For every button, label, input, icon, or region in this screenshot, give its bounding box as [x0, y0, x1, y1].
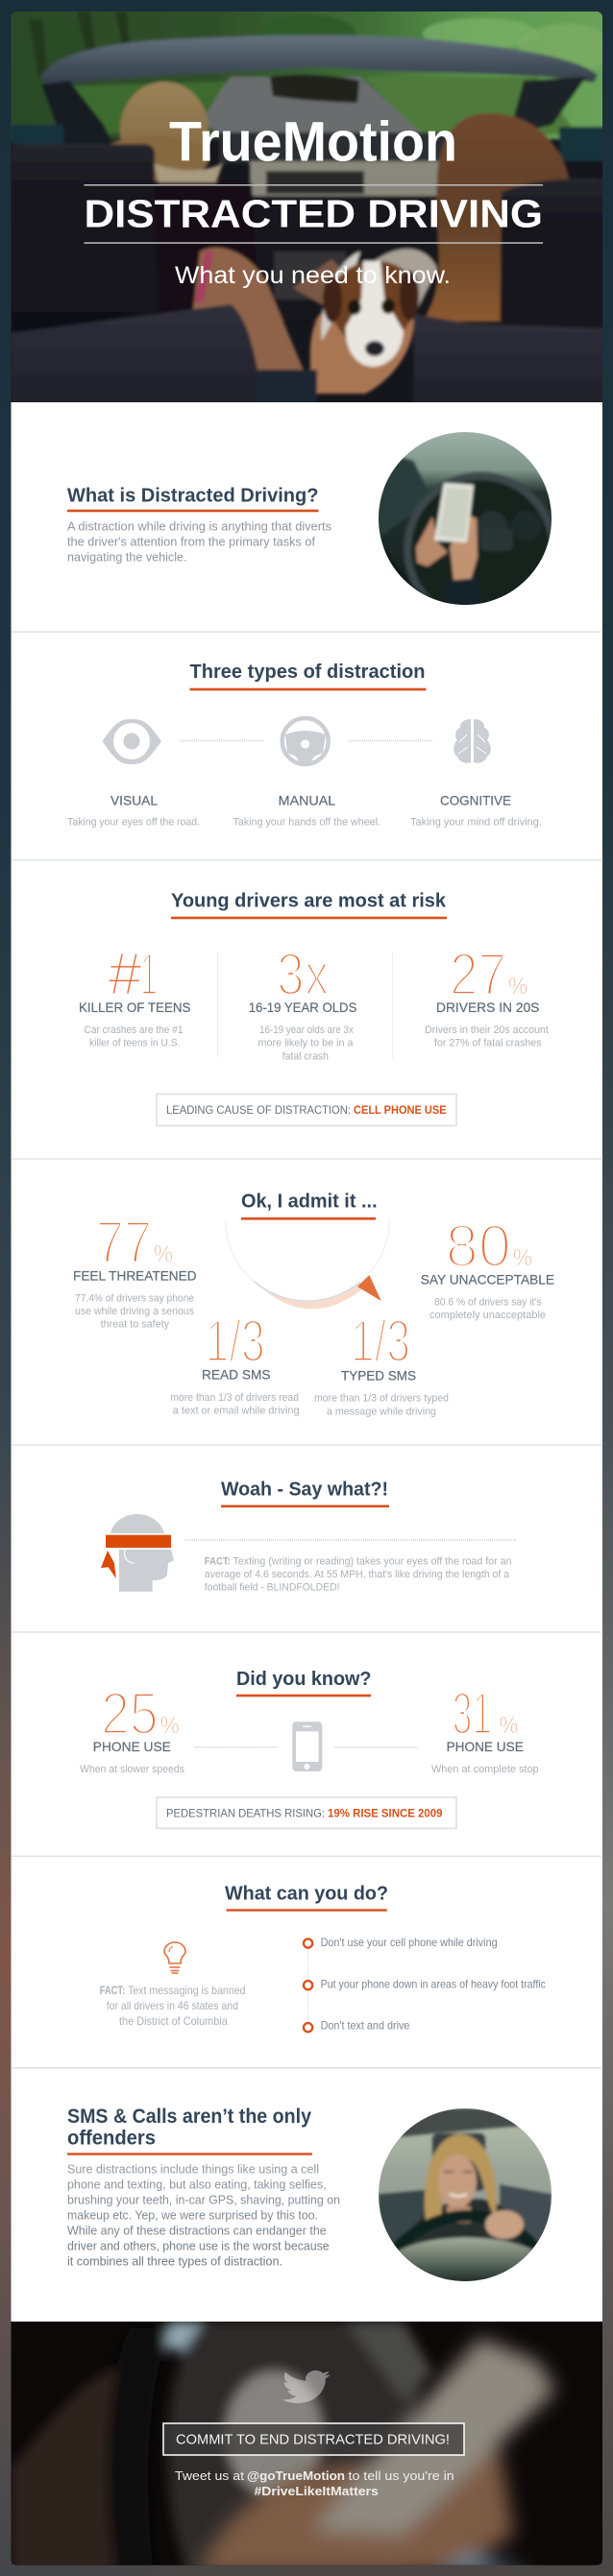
- heading: What is Distracted Driving?: [67, 486, 319, 507]
- panel: footer call to action: [11, 2322, 603, 2573]
- stat: 31% phone use: PHONE USE: [447, 1739, 524, 1754]
- body text: Sure distractions include things like using a cell: [67, 2162, 319, 2177]
- stat: 25% phone use: PHONE USE: [93, 1739, 171, 1754]
- definition text: A distraction while driving is anything that diverts: [67, 519, 331, 534]
- heading: SMS & Calls aren’t the only: [67, 2106, 311, 2128]
- stat: 80% say unacceptable: 80: [446, 1214, 511, 1280]
- stat: 77% feel threatened: 77: [96, 1210, 152, 1276]
- heading: What can you do?: [225, 1883, 388, 1904]
- tweet message: to tell us you're in: [348, 2468, 454, 2483]
- column: visual: [67, 793, 200, 828]
- heading: Young drivers are most at risk: [171, 890, 447, 911]
- stat: 1/3 read SMS: [170, 1309, 300, 1417]
- icon: eye: [103, 719, 161, 764]
- tweet message: Tweet us at: [175, 2468, 244, 2483]
- stat: #1 killer of teens: [79, 941, 190, 1049]
- panel: did you know: [80, 1669, 539, 1828]
- stat: 27%: DRIVERS IN 20S: [436, 999, 539, 1015]
- stat: 31% phone use: [431, 1681, 539, 1775]
- body text: phone and texting, but also eating, taking selfies,: [67, 2178, 327, 2192]
- body text: driver and others, phone use is the worst because: [67, 2239, 330, 2253]
- column: manual: MANUAL: [279, 793, 335, 808]
- stat: 80% say unacceptable: %: [513, 1244, 532, 1271]
- column: visual: VISUAL: [110, 793, 158, 808]
- fact text: FACT:: [205, 1555, 231, 1567]
- fact text: for all drivers in 46 states and: [107, 1999, 238, 2012]
- stat: 80% say unacceptable: SAY UNACCEPTABLE: [421, 1271, 554, 1287]
- stat: 80% say unacceptable: 80.6 % of drivers say it's: [434, 1296, 542, 1308]
- panel: what can you do: [100, 1883, 546, 2032]
- stat: 1/3 read SMS: 1/3: [206, 1309, 265, 1375]
- divider: [12, 2067, 601, 2068]
- stat: 27%: Drivers in their 20s account: [425, 1024, 549, 1036]
- stat: #1 killer of teens: Car crashes are the #1: [85, 1024, 183, 1036]
- stat: 3x: 16-19 YEAR OLDS: [249, 999, 356, 1015]
- heading: Did you know?: [236, 1669, 371, 1690]
- panel: what is distracted driving: [67, 432, 553, 622]
- stat: 80% say unacceptable: completely unacceptable: [429, 1310, 546, 1321]
- callout: leading cause: LEADING CAUSE OF DISTRACTION:: [166, 1103, 351, 1117]
- callout: pedestrian deaths: [157, 1797, 456, 1828]
- tweet message: @goTrueMotion: [247, 2468, 345, 2483]
- stat: 27%: for 27% of fatal crashes: [434, 1038, 542, 1049]
- stat: 1/3 read SMS: more than 1/3 of drivers read: [170, 1392, 299, 1404]
- semicircle gauge with pointer: [226, 1219, 389, 1309]
- stat: 25% phone use: 25: [101, 1681, 159, 1747]
- divider: [12, 631, 601, 633]
- icon: steering wheel: [282, 718, 329, 764]
- column: cognitive: Taking your mind off driving.: [410, 816, 542, 828]
- stat: 31% phone use: 31: [453, 1681, 492, 1747]
- stat: 1/3 typed SMS: more than 1/3 of drivers typed: [314, 1393, 449, 1405]
- column: manual: [233, 793, 380, 828]
- fact text: Texting (writing or reading) takes your eyes off the road for an: [233, 1555, 511, 1567]
- stat: 31% phone use: %: [500, 1713, 519, 1740]
- definition text: the driver's attention from the primary tasks of: [67, 535, 315, 549]
- stat: 1/3 typed SMS: [314, 1309, 449, 1417]
- footer photo: hand with phone at wheel: [11, 2322, 603, 2573]
- stat: #1 killer of teens: 1: [140, 942, 158, 1008]
- stat: #1 killer of teens: KILLER OF TEENS: [79, 999, 190, 1015]
- stat: 77% feel threatened: [73, 1210, 197, 1331]
- timeline list: [304, 1936, 546, 2032]
- stat: 77% feel threatened: use while driving a serious: [75, 1306, 194, 1317]
- stat: #1 killer of teens: #: [109, 941, 142, 1008]
- column: cognitive: [410, 793, 542, 828]
- icon: brain: [454, 719, 491, 763]
- stat: 77% feel threatened: 77.4% of drivers say phone: [75, 1292, 194, 1304]
- panel: ok I admit it: [73, 1192, 554, 1417]
- callout: leading cause: CELL PHONE USE: [354, 1103, 447, 1117]
- stat: #1 killer of teens: killer of teens in U.S.: [89, 1038, 181, 1049]
- stat: 3x: fatal crash: [282, 1050, 329, 1062]
- heading: Woah - Say what?!: [221, 1480, 388, 1501]
- fact text: [205, 1555, 512, 1594]
- callout: pedestrian deaths: 19% RISE SINCE 2009: [328, 1806, 443, 1819]
- list item 1: Don't use your cell phone while driving: [321, 1936, 498, 1949]
- body text: [67, 2162, 340, 2269]
- tweet message: [175, 2468, 454, 2498]
- fact text: FACT:: [100, 1984, 125, 1997]
- column: manual: Taking your hands off the wheel.: [233, 816, 380, 828]
- stat: 77% feel threatened: %: [154, 1240, 173, 1267]
- stat: 27%: %: [508, 974, 527, 1000]
- logo: TrueMotion: [169, 111, 457, 173]
- fact text: Text messaging is banned: [128, 1984, 246, 1997]
- heading: offenders: [67, 2127, 156, 2149]
- body text: While any of these distractions can endanger the: [67, 2224, 327, 2238]
- stat: 77% feel threatened: FEEL THREATENED: [73, 1267, 197, 1283]
- stat: 77% feel threatened: threat to safety: [101, 1319, 169, 1331]
- divider: [12, 1631, 601, 1633]
- stat: 25% phone use: %: [160, 1713, 180, 1740]
- heading: [67, 2106, 312, 2155]
- divider: [12, 859, 601, 860]
- tweet message: #DriveLikeItMatters: [254, 2484, 379, 2498]
- stat: 31% phone use: When at complete stop: [431, 1764, 539, 1775]
- column: cognitive: COGNITIVE: [440, 793, 511, 808]
- hero photo: convertible interior with dog: [5, 5, 613, 408]
- icon: blindfolded head: [101, 1514, 174, 1592]
- callout: leading cause: [157, 1095, 456, 1125]
- body text: brushing your teeth, in-car GPS, shaving, putting on: [67, 2193, 340, 2207]
- stat: 3x: more likely to be in a: [257, 1038, 354, 1049]
- stat: 3x: [249, 942, 356, 1062]
- stat: 3x: 16-19 year olds are 3x: [259, 1024, 354, 1036]
- stat: 1/3 typed SMS: 1/3: [351, 1309, 410, 1375]
- body text: it combines all three types of distraction.: [67, 2254, 282, 2269]
- stat: 27%: 27: [450, 942, 506, 1008]
- column: visual: Taking your eyes off the road.: [67, 816, 200, 828]
- definition text: navigating the vehicle.: [67, 550, 186, 565]
- stat: 1/3 typed SMS: TYPED SMS: [341, 1367, 416, 1383]
- panel: other offenders: [67, 2106, 552, 2285]
- stat: 1/3 read SMS: READ SMS: [202, 1367, 271, 1383]
- panel: three types of distraction: [67, 662, 542, 828]
- fact text: [100, 1984, 246, 2028]
- subtitle: What you need to know.: [175, 262, 451, 289]
- photo: hands holding phone at wheel: [379, 432, 552, 605]
- white content card: [12, 402, 602, 2322]
- call to action button: [163, 2423, 464, 2455]
- stat: 3x: 3x: [277, 942, 329, 1008]
- heading: Ok, I admit it ...: [241, 1192, 378, 1213]
- divider: [12, 1444, 601, 1446]
- stat: 80% say unacceptable: [421, 1214, 554, 1321]
- icon: twitter bird: [282, 2371, 331, 2403]
- icon: light bulb: [164, 1942, 185, 1973]
- stat: 1/3 read SMS: a text or email while driving: [173, 1406, 300, 1417]
- heading: Three types of distraction: [190, 662, 425, 683]
- panel: woah say what: [101, 1480, 516, 1594]
- definition text: [67, 519, 331, 565]
- divider: [12, 1158, 601, 1160]
- list item 3: Don't text and drive: [321, 2018, 410, 2032]
- call to action button: COMMIT TO END DISTRACTED DRIVING!: [176, 2432, 450, 2448]
- body text: makeup etc. Yep, we were surprised by this too.: [67, 2208, 318, 2223]
- title: DISTRACTED DRIVING: [85, 192, 543, 236]
- stat: 25% phone use: When at slower speeds: [80, 1764, 184, 1775]
- icon: phone: [292, 1721, 322, 1771]
- callout: pedestrian deaths: PEDESTRIAN DEATHS RISING:: [166, 1806, 325, 1819]
- fact text: football field - BLINDFOLDED!: [205, 1582, 340, 1594]
- fact text: average of 4.6 seconds. At 55 MPH, that's like driving the length of a: [205, 1569, 510, 1580]
- stat: 1/3 typed SMS: a message while driving: [327, 1406, 436, 1417]
- panel: young drivers: [79, 890, 549, 1125]
- fact text: the District of Columbia: [119, 2014, 228, 2028]
- photo: woman driving: [379, 2108, 552, 2285]
- stat: 25% phone use: [80, 1681, 184, 1775]
- panel: hero: [5, 5, 613, 408]
- stat: 27%: [425, 942, 549, 1049]
- divider: [12, 1856, 601, 1857]
- list item 2: Put your phone down in areas of heavy foot traffic: [321, 1977, 546, 1990]
